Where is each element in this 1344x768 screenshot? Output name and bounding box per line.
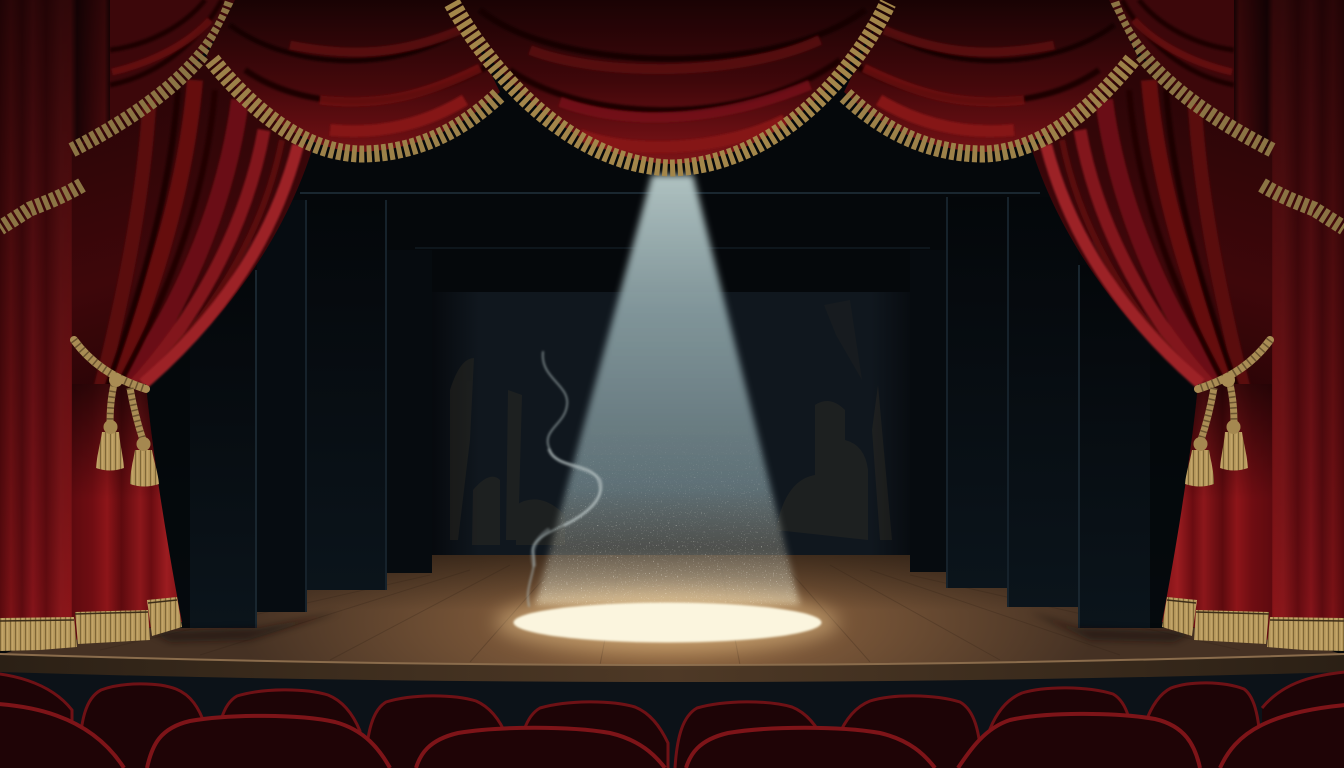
audience seats, front row	[0, 703, 1344, 768]
overhead batten lines	[300, 193, 1040, 248]
black side curtains, right	[910, 197, 1198, 628]
small side fringe	[0, 185, 82, 228]
pool of light on the floor	[495, 592, 839, 652]
left swag	[207, 0, 500, 154]
far outer swag	[72, 0, 235, 150]
stage front wall	[0, 668, 1344, 768]
wisp of smoke	[528, 352, 601, 606]
painted backdrop with faint silhouettes	[430, 292, 920, 555]
spotlight beam	[532, 170, 802, 608]
black side curtains, left	[145, 200, 432, 628]
curtain shadows on the floor	[150, 612, 1194, 642]
rope tie-back	[74, 340, 146, 440]
audience seats, back row	[0, 670, 1344, 768]
gathered upper curtain	[72, 50, 312, 392]
right red curtain, swags and fringe	[844, 0, 1344, 651]
stage front edge	[0, 654, 1344, 682]
tassels	[96, 420, 159, 486]
left red curtain with tie-back	[0, 0, 500, 651]
wooden stage floor	[0, 555, 1344, 670]
outer drape	[0, 0, 110, 625]
lower curtain below the tie-back	[72, 384, 182, 640]
bottom fringe	[0, 597, 182, 651]
centre swag with gold fringe	[450, 0, 890, 168]
